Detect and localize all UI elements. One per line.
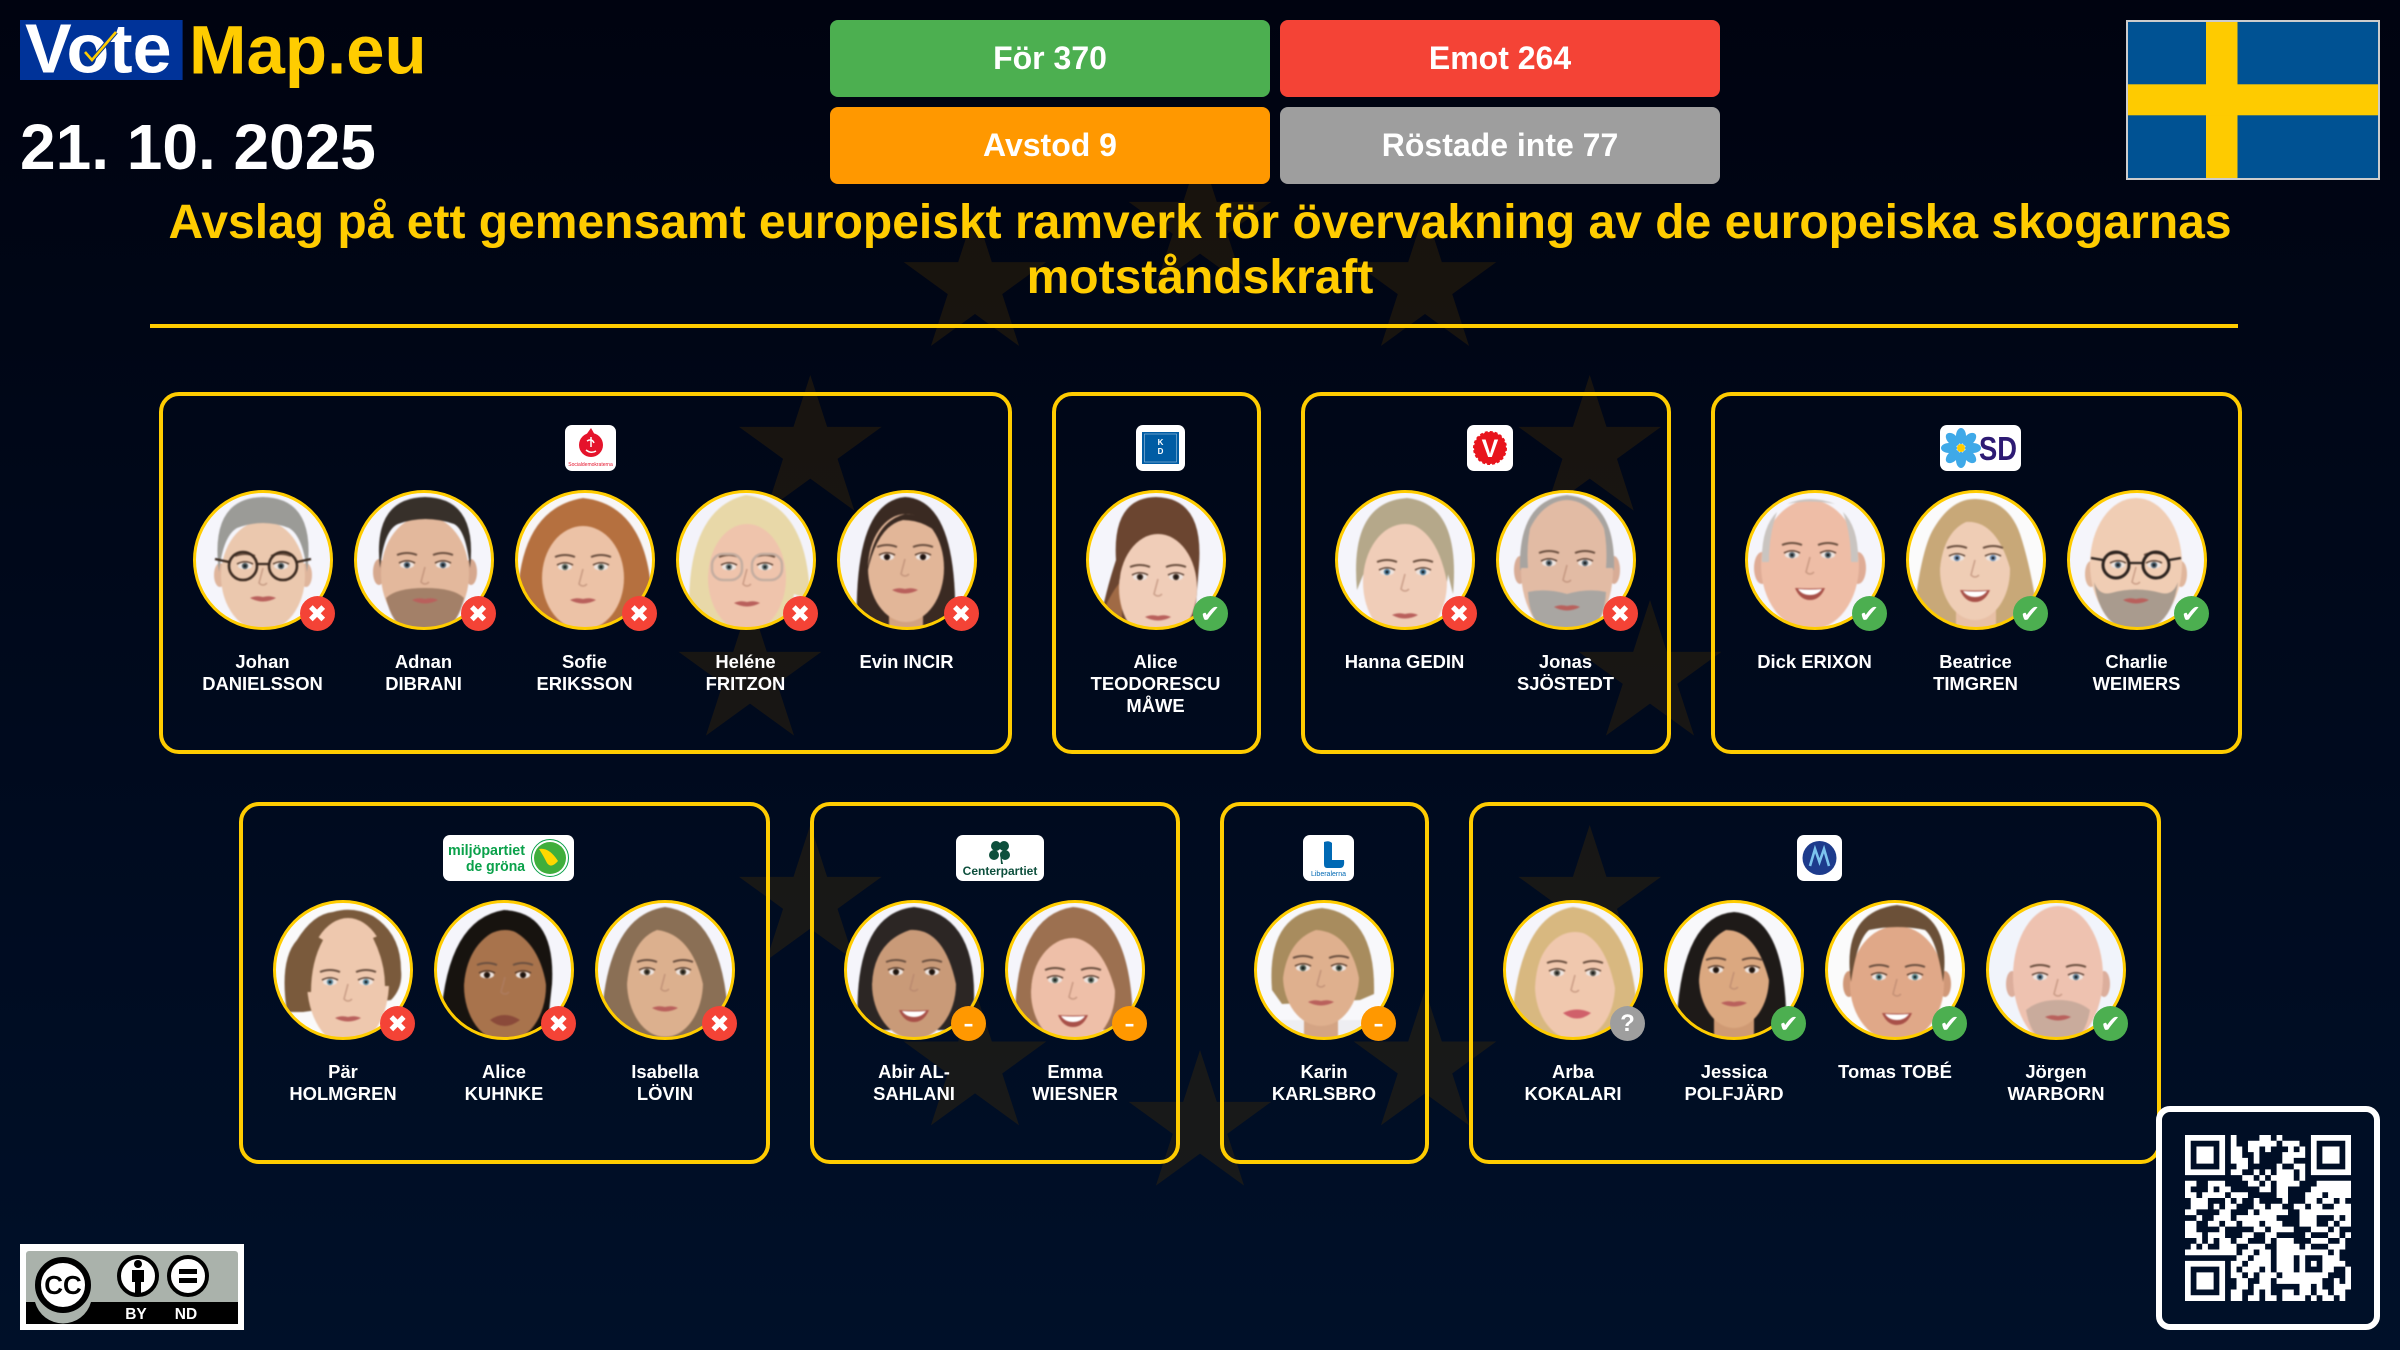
date: 21. 10. 2025 [20, 111, 376, 183]
party logo: Miljöpartiet de gröna: de gröna [466, 858, 526, 875]
portrait [515, 490, 655, 630]
vote badge: against: ✖ [1449, 600, 1469, 628]
vote badge: against: ✖ [790, 600, 810, 628]
vote badge: for [1192, 596, 1228, 631]
vote badge: against: ✖ [629, 600, 649, 628]
license badge: CC BY-ND: ND [175, 1306, 197, 1323]
portrait [837, 490, 977, 630]
name: Pär [328, 1061, 358, 1082]
name: Sofie [562, 651, 607, 672]
name: SAHLANI [873, 1083, 955, 1104]
name: Heléne [715, 651, 776, 672]
vote badge: against [622, 596, 656, 631]
name: Karin [1300, 1061, 1348, 1082]
vote badge: against [702, 1006, 737, 1041]
panel: Liberalerna [1220, 802, 1429, 1164]
name: SJÖSTEDT [1517, 673, 1614, 694]
name [289, 1061, 397, 1104]
name: Alice [1134, 651, 1177, 672]
name: TIMGREN [1933, 673, 2018, 694]
person: Isabella LÖVIN [595, 900, 737, 1104]
name [706, 651, 785, 694]
name: Jonas [1539, 651, 1592, 672]
name: Alice [482, 1061, 526, 1082]
name: Abir AL- [878, 1061, 950, 1082]
name: Emma [1047, 1061, 1103, 1082]
vote badge: against: ✖ [387, 1010, 408, 1038]
person: Karin KARLSBRO [1254, 900, 1396, 1104]
vote badge: for: ✔ [1200, 600, 1220, 628]
vote badge: against: ✖ [1610, 600, 1630, 628]
vote badge: against [782, 596, 818, 631]
vote badge: for: ✔ [1778, 1010, 1799, 1038]
logo: VoteMap.eu: Vote [25, 10, 172, 88]
vote badge: for [1771, 1006, 1806, 1041]
party logo: SD [1940, 425, 2021, 471]
QR code [2156, 1106, 2380, 1330]
panel: Centerpartiet [810, 802, 1180, 1164]
name [631, 1061, 699, 1104]
name: Adnan [395, 651, 452, 672]
vote badge: for: ✔ [2020, 600, 2040, 628]
portrait [354, 490, 494, 630]
person: Dick ERIXON [1745, 490, 1887, 672]
portrait [1906, 490, 2046, 630]
title divider [150, 324, 2238, 328]
name [1272, 1061, 1376, 1104]
vote count: abstain: Avstod 9 [983, 127, 1117, 163]
name [873, 1061, 955, 1104]
panel: Vänsterpartiet [1300, 392, 1670, 754]
portrait [595, 900, 735, 1040]
portrait [193, 490, 333, 630]
name: FRITZON [706, 673, 785, 694]
vote badge: for [2093, 1006, 2128, 1041]
portrait [1825, 900, 1965, 1040]
party logo: Miljöpartiet de gröna: miljöpartiet [448, 842, 525, 859]
person: Emma WIESNER [1005, 900, 1147, 1104]
vote badge: for [1932, 1006, 1967, 1041]
name: KARLSBRO [1272, 1083, 1376, 1104]
name [1090, 651, 1220, 716]
name: MÅWE [1126, 695, 1185, 716]
vote count: against [1280, 20, 1720, 97]
portrait [1496, 490, 1636, 630]
vote badge: against [1442, 596, 1476, 631]
portrait [1335, 490, 1475, 630]
logo: VoteMap.eu: Map.eu [189, 12, 427, 88]
name [385, 651, 462, 694]
person: Alice TEODORESCU MÅWE [1086, 490, 1228, 716]
party logo: Centerpartiet [956, 835, 1044, 881]
vote badge: abstain: – [1124, 1012, 1134, 1036]
name: WIESNER [1032, 1083, 1118, 1104]
license badge: CC BY-ND: BY [125, 1306, 147, 1323]
name: WEIMERS [2093, 673, 2180, 694]
person: Beatrice TIMGREN [1906, 490, 2048, 694]
name: Hanna GEDIN [1345, 651, 1464, 672]
person: Jessica POLFJÄRD [1664, 900, 1806, 1104]
name: Charlie [2105, 651, 2168, 672]
portrait [1005, 900, 1145, 1040]
license badge: CC BY-ND: CC [44, 1270, 82, 1300]
portrait [1086, 490, 1226, 630]
panel: Socialdemokraterna [158, 392, 1012, 754]
vote badge: against: ✖ [548, 1010, 569, 1038]
name [536, 651, 633, 694]
party logo: Liberalerna [1303, 835, 1354, 881]
name: Jörgen [2025, 1061, 2087, 1082]
panel: Sverigedemokraterna [1710, 392, 2242, 754]
logo: VoteMap.eu [20, 10, 427, 88]
vote badge: against [944, 596, 978, 631]
vote count: for: För 370 [993, 40, 1107, 76]
name: ERIKSSON [536, 673, 633, 694]
license badge: CC BY-ND [20, 1244, 244, 1330]
person: Heléne FRITZON [676, 490, 818, 694]
name: LÖVIN [637, 1083, 693, 1104]
name: HOLMGREN [289, 1083, 397, 1104]
name [202, 651, 323, 694]
vote badge: against: ✖ [307, 600, 327, 628]
vote badge: against [300, 596, 334, 631]
person: Hanna GEDIN [1335, 490, 1477, 672]
portrait [434, 900, 574, 1040]
vote badge: against: ✖ [709, 1010, 730, 1038]
vote badge: for: ✔ [2100, 1010, 2121, 1038]
party logo: Centerpartiet: Centerpartiet [963, 864, 1037, 878]
name: Dick ERIXON [1757, 651, 1872, 672]
person: Jonas SJÖSTEDT [1496, 490, 1638, 694]
vote badge: for: ✔ [2181, 600, 2201, 628]
name: Arba [1552, 1061, 1594, 1082]
person: Charlie WEIMERS [2067, 490, 2209, 694]
name [1524, 1061, 1622, 1104]
panel: Miljöpartiet [239, 802, 770, 1164]
portrait [273, 900, 413, 1040]
vote badge: against [541, 1006, 576, 1041]
vote badge: for: ✔ [1939, 1010, 1960, 1038]
vote badge: did not vote [1610, 1006, 1645, 1041]
party logo: Socialdemokraterna: Socialdemokraterna [568, 462, 613, 468]
vote count: for [830, 20, 1270, 97]
name: Beatrice [1939, 651, 2012, 672]
panel: Kristdemokraterna [1052, 392, 1260, 754]
party logo: KD: K [1158, 438, 1164, 447]
name: POLFJÄRD [1684, 1083, 1784, 1104]
portrait [676, 490, 816, 630]
vote badge: abstain: – [964, 1012, 974, 1036]
person: Adnan DIBRANI [354, 490, 496, 694]
portrait [1986, 900, 2126, 1040]
name: DANIELSSON [202, 673, 323, 694]
vote badge: for: ✔ [1859, 600, 1879, 628]
vote badge: for [2174, 596, 2208, 631]
vote badge: abstain [1112, 1006, 1147, 1041]
vote badge: abstain [1361, 1006, 1396, 1041]
name: WARBORN [2007, 1083, 2105, 1104]
name [1684, 1061, 1784, 1104]
vote badge: abstain [951, 1006, 986, 1041]
name: Johan [235, 651, 290, 672]
vote badge: against [1602, 596, 1638, 631]
vote count: did not vote: Röstade inte 77 [1382, 127, 1618, 163]
person: Tomas TOBÉ [1825, 900, 1967, 1082]
name: KOKALARI [1524, 1083, 1622, 1104]
vote badge: abstain: – [1374, 1012, 1384, 1036]
title [168, 196, 2232, 304]
portrait [1745, 490, 1885, 630]
vote badge: for [1852, 596, 1886, 631]
name: TEODORESCU [1091, 673, 1220, 694]
vote count: against: Emot 264 [1429, 40, 1571, 76]
name: DIBRANI [385, 673, 462, 694]
name: Tomas TOBÉ [1838, 1061, 1952, 1082]
flag: Sweden [2126, 20, 2380, 180]
vote count: abstain [830, 107, 1270, 184]
party logo: Moderaterna [1797, 835, 1842, 881]
party logo: Socialdemokraterna [565, 425, 616, 471]
person: Pär HOLMGREN [273, 900, 415, 1104]
person: Sofie ERIKSSON [515, 490, 657, 694]
portrait [1254, 900, 1394, 1040]
party logo: V [1467, 425, 1513, 471]
vote count: did not vote [1280, 107, 1720, 184]
party logo: Liberalerna: Liberalerna [1311, 871, 1346, 878]
person: Arba KOKALARI [1503, 900, 1645, 1104]
party logo: V: V [1482, 435, 1499, 463]
name [1517, 651, 1614, 694]
name: Evin INCIR [859, 651, 954, 672]
name [465, 1061, 543, 1104]
person: Evin INCIR [837, 490, 979, 672]
portrait [1503, 900, 1643, 1040]
portrait [844, 900, 984, 1040]
name [1032, 1061, 1118, 1104]
title: motståndskraft [1027, 251, 1373, 304]
portrait [2067, 490, 2207, 630]
person: Johan DANIELSSON [193, 490, 335, 694]
title: Avslag på ett gemensamt europeiskt ramverk för övervakning av de europeiska skogarnas [168, 196, 2232, 249]
party logo: Miljöpartiet de gröna [443, 835, 574, 881]
name [2092, 651, 2180, 694]
person: Alice KUHNKE [434, 900, 576, 1104]
party logo: KD [1136, 425, 1185, 471]
vote badge: against: ✖ [468, 600, 488, 628]
vote badge: against [380, 1006, 415, 1041]
portrait [1664, 900, 1804, 1040]
name [2007, 1061, 2105, 1104]
name: Jessica [1701, 1061, 1767, 1082]
name [1933, 651, 2018, 694]
vote badge: against: ✖ [951, 600, 971, 628]
panel: Moderaterna [1469, 802, 2161, 1164]
vote badge: did not vote: ? [1620, 1010, 1635, 1036]
vote badge: against [460, 596, 496, 631]
party logo: KD: D [1158, 447, 1164, 456]
vote badge: for [2012, 596, 2048, 631]
name: Isabella [631, 1061, 699, 1082]
name: KUHNKE [465, 1083, 543, 1104]
person: Abir AL-SAHLANI [844, 900, 986, 1104]
person: Jörgen WARBORN [1986, 900, 2128, 1104]
